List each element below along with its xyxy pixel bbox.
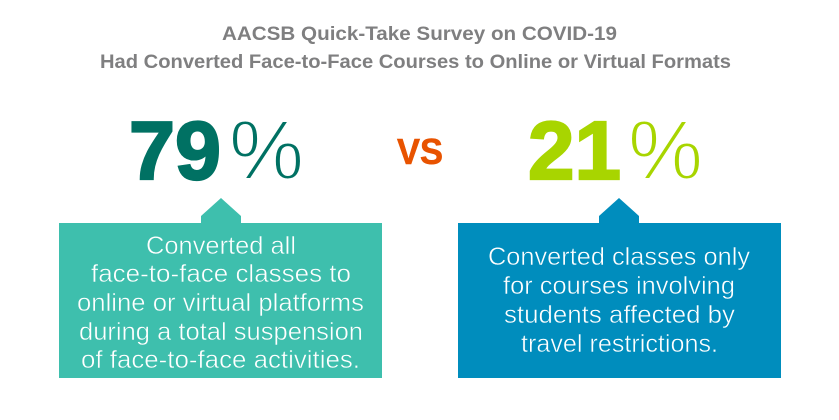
statistic: 21 percent: %: [628, 103, 703, 197]
panel text: online or virtual platforms: [77, 289, 364, 317]
panel text: travel restrictions.: [521, 330, 718, 358]
statistic: 21 percent: 21: [528, 104, 621, 197]
versus label: VS: [397, 131, 443, 172]
panel: converted all classes: [59, 198, 382, 378]
title: [100, 24, 731, 73]
panel text: Converted all: [146, 232, 296, 260]
statistic: 21 percent: [528, 103, 703, 197]
panel: converted travel-restricted classes: [458, 198, 781, 378]
panel text: for courses involving: [503, 272, 735, 300]
panel text: Converted classes only: [488, 243, 750, 271]
title: Had Converted Face-to-Face Courses to Online or Virtual Formats: [100, 52, 731, 73]
panel text: [488, 243, 750, 358]
callout box with pointer: [59, 198, 382, 378]
statistic: 79 percent: %: [229, 103, 304, 197]
statistic: 79 percent: [129, 103, 304, 197]
statistic: 79 percent: 79: [129, 104, 221, 197]
panel text: face-to-face classes to: [91, 260, 351, 288]
callout box with pointer: [458, 198, 781, 378]
panel text: of face-to-face activities.: [81, 346, 360, 374]
panel text: [77, 232, 364, 374]
title: AACSB Quick-Take Survey on COVID-19: [222, 24, 617, 45]
panel text: students affected by: [504, 301, 736, 329]
panel text: during a total suspension: [79, 318, 363, 346]
